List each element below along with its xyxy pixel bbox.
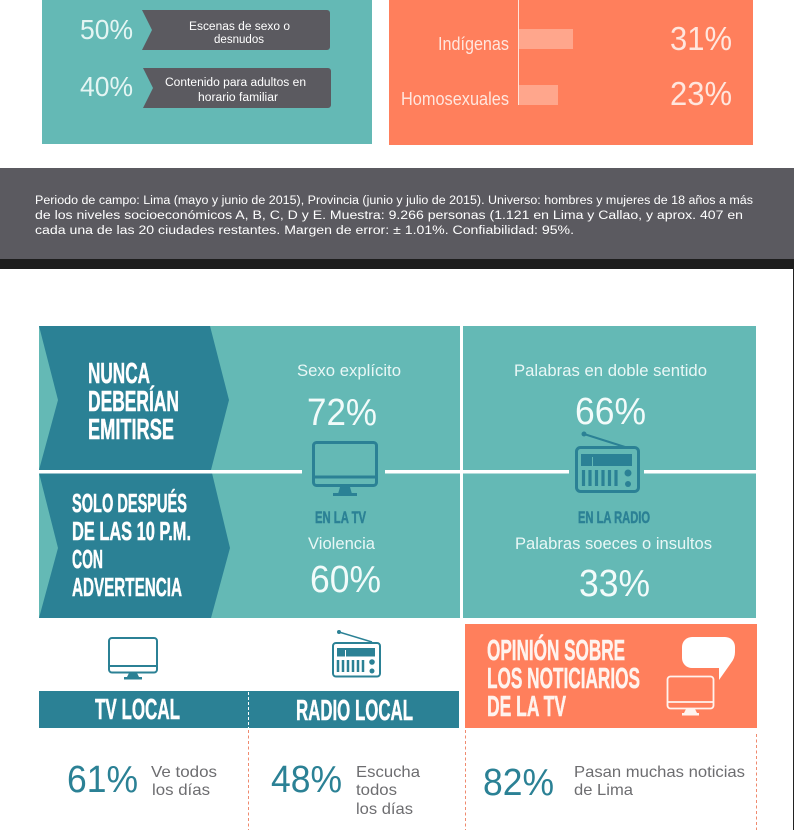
label: on radio: EN LA RADIO — [578, 508, 650, 527]
stat: double meaning 66% — [514, 362, 707, 433]
bar: Homosexuales 23%: Homosexuales — [401, 89, 509, 109]
stat: 50% nude scenes: 50% — [80, 14, 133, 45]
panel: methodology note — [0, 168, 794, 269]
panel: opinion on TV news: DE LA TV — [487, 691, 566, 723]
stat: radio local 48%: los días — [356, 801, 413, 818]
icon: white television — [668, 676, 714, 716]
stat: violence 60%: 60% — [310, 559, 381, 601]
panel: objectionable content percentages — [42, 0, 372, 144]
heading band: TV local and radio local: RADIO LOCAL — [296, 695, 413, 727]
chevron: only after 10 pm — [39, 473, 230, 618]
bar: Indígenas 31%: Indígenas — [438, 34, 509, 54]
chevron: only after 10 pm: DE LAS 10 P.M. — [72, 516, 191, 546]
chevron: never broadcast: EMITIRSE — [88, 414, 174, 446]
stat: radio local 48%: Escucha — [356, 764, 420, 781]
stat: 40% adult content: Contenido para adultos en — [165, 77, 306, 89]
stat: 50% nude scenes: desnudos — [214, 34, 264, 46]
stat: 40% adult content: horario familiar — [198, 92, 278, 104]
icon: small radio — [333, 630, 380, 676]
stat: news 82%: 82% — [483, 762, 554, 804]
icon: small television — [109, 638, 157, 680]
panel: radio opinions — [460, 326, 756, 618]
panel: bar chart of groups — [389, 0, 753, 145]
label: on TV: EN LA TV — [315, 508, 366, 527]
stat: news 82%: de Lima — [574, 782, 633, 799]
panel: opinion on TV news: LOS NOTICIARIOS — [487, 663, 640, 695]
stat: news 82%: Pasan muchas noticias — [574, 764, 745, 781]
chevron: never broadcast: DEBERÍAN — [88, 384, 179, 418]
stat: news 82% — [483, 762, 745, 804]
stat: 50% nude scenes: Escenas de sexo o — [189, 21, 290, 33]
chevron: only after 10 pm: ADVERTENCIA — [72, 572, 182, 602]
panel: opinion on TV news: OPINIÓN SOBRE — [487, 633, 625, 667]
stat: explicit sex 72% — [297, 362, 401, 434]
panel: methodology note: cada una de las 20 ciudades restantes. Margen de error: ± 1.01%. Confiabilidad: 95%. — [35, 225, 574, 237]
icon: radio — [576, 432, 638, 492]
stat: 40% adult content — [80, 68, 331, 108]
panel: methodology note: Periodo de campo: Lima (mayo y junio de 2015), Provincia (junio y julio de 2015). Universo: hombres y mujeres de 18 años a más — [35, 195, 753, 207]
stat: explicit sex 72%: 72% — [307, 392, 377, 434]
stat: TV local 61%: 61% — [67, 759, 138, 801]
bar: Indígenas 31%: 31% — [670, 20, 732, 57]
bar: Homosexuales 23% — [401, 75, 732, 112]
chevron: never broadcast: NUNCA — [88, 358, 150, 390]
stat: radio local 48% — [271, 759, 420, 818]
chevron: never broadcast — [39, 326, 229, 470]
bar: Indígenas 31% — [438, 20, 732, 57]
stat: swear words 33%: 33% — [579, 563, 650, 605]
icon: speech bubble — [682, 637, 735, 680]
stat: TV local 61%: Ve todos — [151, 764, 217, 781]
stat: TV local 61%: los días — [152, 782, 210, 799]
stat: double meaning 66%: 66% — [575, 391, 646, 433]
stat: violence 60% — [308, 535, 381, 601]
heading band: TV local and radio local — [39, 691, 459, 728]
chevron: only after 10 pm: CON — [72, 544, 103, 574]
stat: 50% nude scenes — [80, 10, 330, 50]
bar: Homosexuales 23%: 23% — [670, 75, 732, 112]
stat: swear words 33% — [515, 535, 712, 605]
panel: TV opinions — [39, 326, 460, 618]
stat: violence 60%: Violencia — [308, 535, 376, 553]
stat: double meaning 66%: Palabras en doble sentido — [514, 362, 707, 380]
stat: TV local 61% — [67, 759, 217, 801]
icon: television — [314, 442, 376, 496]
chevron: only after 10 pm: SOLO DESPUÉS — [72, 488, 187, 518]
stat: swear words 33%: Palabras soeces o insultos — [515, 535, 712, 553]
heading band: TV local and radio local: TV LOCAL — [95, 694, 180, 726]
stat: radio local 48%: todos — [356, 782, 397, 799]
panel: opinion on TV news — [465, 624, 757, 728]
panel: methodology note: de los niveles socioeconómicos A, B, C, D y E. Muestra: 9.266 personas (1.121 en Lima y Callao, y aprox. 407 en — [35, 210, 743, 222]
stat: 40% adult content: 40% — [80, 71, 133, 102]
stat: radio local 48%: 48% — [271, 759, 342, 801]
stat: explicit sex 72%: Sexo explícito — [297, 362, 401, 380]
